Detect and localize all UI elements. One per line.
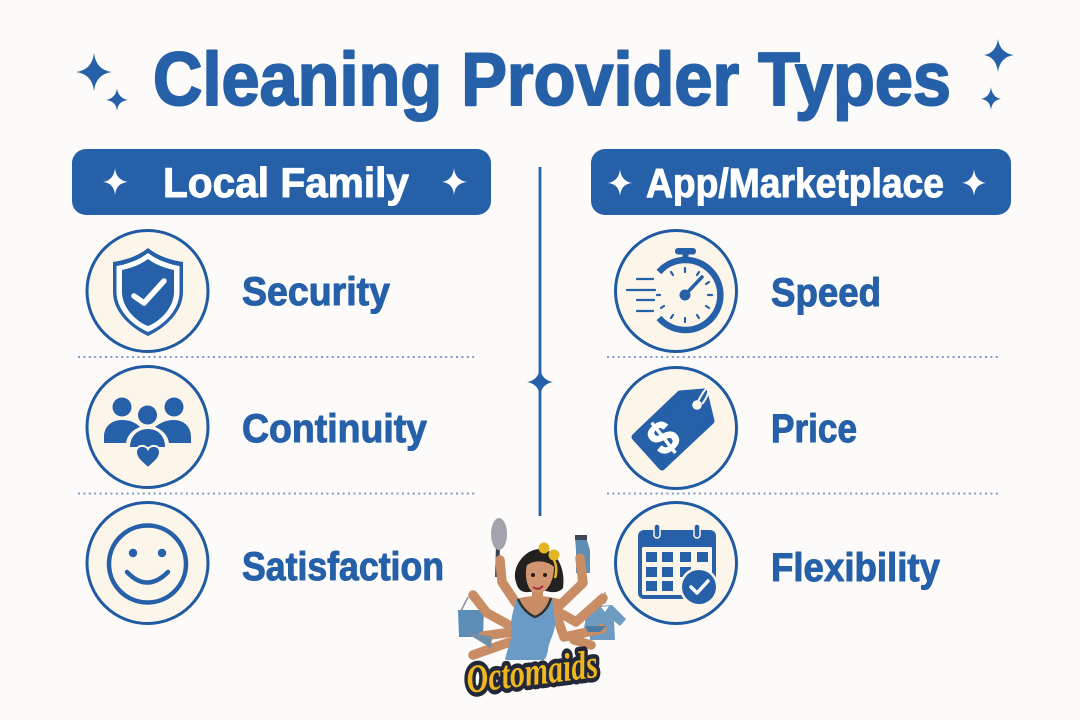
icon: family with heart — [87, 366, 208, 488]
label: Price: Price — [771, 407, 857, 451]
dress — [505, 598, 555, 660]
mascot: Octomaids logo character — [458, 518, 626, 702]
panel: Local Family header — [72, 149, 491, 215]
icon: header sparkles left — [103, 168, 467, 195]
shirt — [584, 592, 626, 640]
arms — [473, 558, 603, 655]
bow — [538, 542, 560, 578]
icon: left title sparkles — [76, 53, 128, 111]
duster — [491, 518, 507, 577]
icon: right title sparkles — [981, 39, 1014, 110]
label: Continuity: Continuity — [242, 407, 428, 451]
label: Speed: Speed — [771, 271, 881, 315]
icon: price tag: $ — [637, 409, 689, 466]
iron — [463, 631, 492, 648]
icon: calendar with check — [616, 502, 736, 624]
title: Cleaning Provider Types — [153, 37, 951, 121]
logo wordmark: Octomaids — [464, 641, 600, 702]
icon: price tag — [616, 368, 736, 488]
icon: smiley face — [87, 502, 208, 624]
panel: App/Marketplace header — [591, 149, 1011, 215]
icon: stopwatch — [616, 230, 736, 352]
label: Satisfaction: Satisfaction — [242, 545, 444, 589]
icon: header sparkles right — [608, 169, 986, 196]
label: Flexibility: Flexibility — [771, 546, 941, 590]
face — [526, 561, 554, 600]
spray bottle — [575, 535, 590, 573]
bucket — [458, 597, 484, 637]
label: Security: Security — [242, 270, 391, 314]
hair — [515, 549, 564, 592]
heading: App/Marketplace: App/Marketplace — [646, 160, 944, 206]
center divider — [527, 167, 553, 516]
icon: security shield — [87, 230, 208, 352]
heading: Local Family: Local Family — [163, 159, 410, 206]
shoulders — [512, 596, 562, 616]
